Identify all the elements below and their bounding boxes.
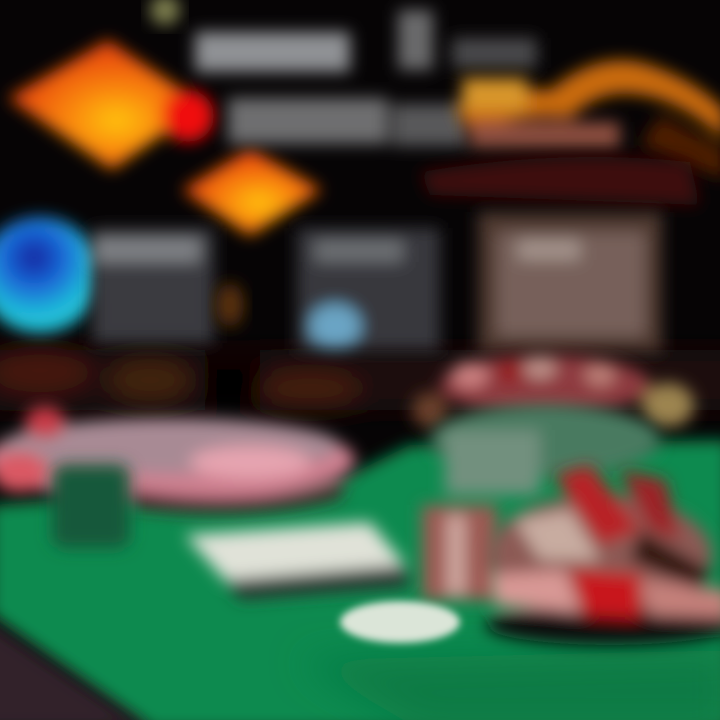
- white round chip: [340, 601, 460, 643]
- red light: [162, 90, 214, 142]
- card heading: [518, 240, 580, 260]
- green chip stack: [52, 464, 130, 548]
- orange arch sign: [455, 60, 720, 180]
- sign subtext: [470, 122, 620, 148]
- icon: blue circle logo: [0, 217, 100, 333]
- dark red awning: [420, 157, 700, 205]
- floor corner: [0, 615, 150, 720]
- title: blurred heading lines: [195, 10, 537, 146]
- sign: small orange diamond: [182, 148, 322, 236]
- panel: green felt table: [0, 440, 720, 720]
- large pink poker chip stack: [0, 406, 355, 513]
- panel: beige card: [478, 212, 662, 352]
- card heading: [92, 238, 200, 262]
- table shading: [300, 650, 720, 720]
- dark tray: [485, 605, 720, 645]
- card heading: [315, 240, 403, 262]
- sign: large orange diamond: [8, 40, 214, 170]
- panel: centre grey card: [297, 228, 440, 350]
- card icon: [309, 304, 361, 348]
- dark red band: [0, 346, 720, 410]
- red and white chip pile: [485, 465, 720, 645]
- small top light: [150, 0, 180, 25]
- small orange light: [216, 283, 244, 327]
- checker pattern chips: [412, 355, 694, 428]
- centre chip tower: [422, 404, 660, 600]
- panel: left grey card: [92, 228, 214, 343]
- white playing cards: [185, 522, 410, 600]
